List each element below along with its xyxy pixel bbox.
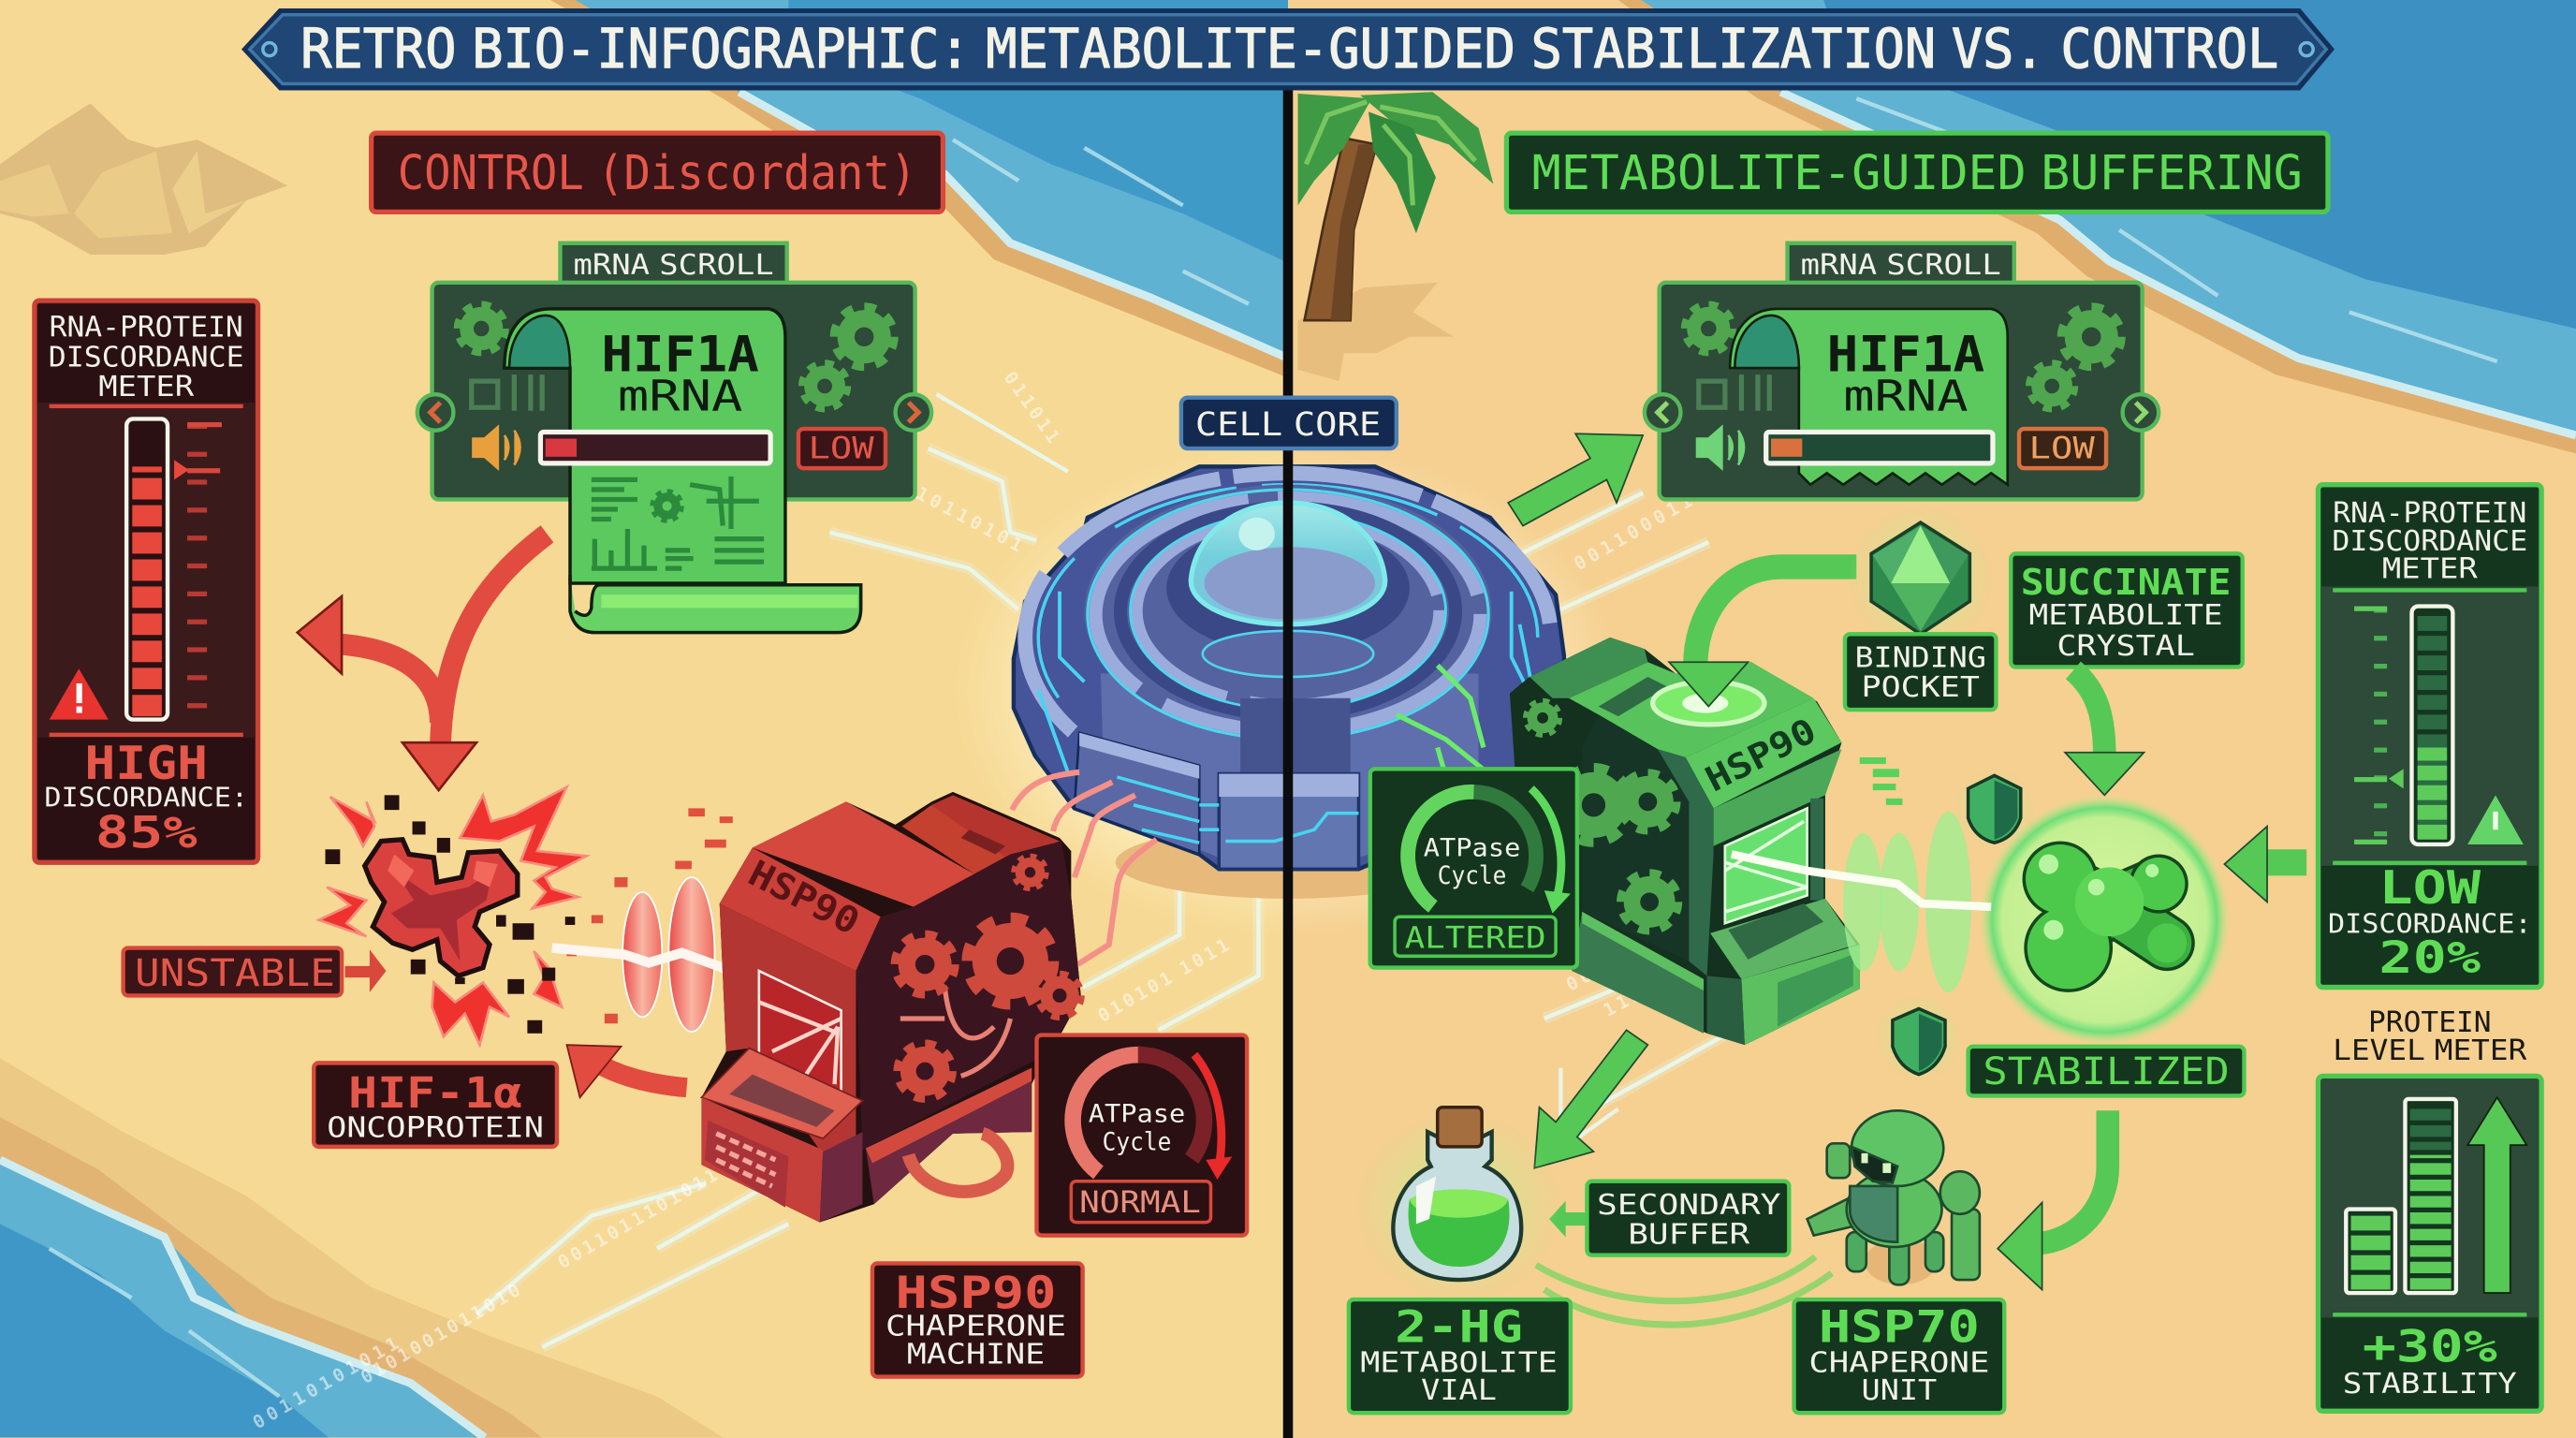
icon: shield upper bbox=[1955, 769, 2034, 847]
label: 2-HG metabolite vial: METABOLITE bbox=[1360, 1346, 1558, 1379]
tall bar bbox=[2405, 1099, 2456, 1293]
label: HIF-1a oncoprotein: ONCOPROTEIN bbox=[327, 1111, 544, 1144]
low tag: LOW bbox=[2029, 433, 2096, 466]
gears bbox=[458, 305, 893, 408]
arrow: core to buffered mRNA bbox=[1508, 433, 1643, 526]
beam: control pulse rings bbox=[552, 877, 736, 1032]
label: succinate metabolite crystal: METABOLITE bbox=[2029, 599, 2223, 632]
progress bar bbox=[1766, 433, 1993, 463]
gears bbox=[1685, 305, 2120, 408]
circuit traces and binary data: 00110101011 bbox=[249, 1332, 402, 1433]
cell core bbox=[951, 444, 1625, 936]
label: binding pocket: POCKET bbox=[1862, 671, 1980, 704]
meter heading: RNA-PROTEIN bbox=[50, 312, 243, 345]
circuit traces and binary data: 0011 1011 01 bbox=[1562, 900, 1718, 995]
meter readout bbox=[2328, 860, 2532, 984]
circuit traces and binary data: 010101 1011 bbox=[1094, 934, 1233, 1027]
scroll tab bbox=[560, 243, 787, 286]
circuit traces and binary data: 0011011101011 bbox=[554, 1165, 722, 1273]
machine: control HSP90 bbox=[701, 792, 1081, 1223]
panel: control ATPase cycle: Cycle bbox=[1103, 1128, 1171, 1156]
panel: control ATPase cycle bbox=[1036, 1028, 1247, 1236]
circuit traces and binary data: 0101001011010 bbox=[357, 1279, 524, 1388]
meter tube bbox=[2354, 607, 2452, 844]
low tag bbox=[2019, 429, 2106, 468]
meter heading: METER bbox=[98, 371, 194, 404]
machine: control HSP90: HSP90 bbox=[741, 853, 866, 944]
icon: warning bbox=[50, 668, 109, 720]
meter heading bbox=[2332, 497, 2527, 586]
arrow: stabilized to HSP70 bbox=[1998, 1110, 2108, 1290]
machine: buffered HSP90: HSP90 bbox=[1699, 711, 1822, 800]
meter readout: 85% bbox=[95, 807, 198, 858]
beam: buffered pulse rings bbox=[1732, 812, 1991, 992]
panel: buffered ATPase cycle: Cycle bbox=[1438, 862, 1506, 890]
central divider bbox=[1283, 91, 1293, 1438]
altered tag: ALTERED bbox=[1405, 922, 1546, 956]
label: 2-HG metabolite vial: 2-HG bbox=[1395, 1302, 1523, 1354]
heading: control: CONTROL (Discordant) bbox=[398, 146, 916, 201]
circuit traces and binary data bbox=[249, 367, 1741, 1433]
arrow: low discordance to protein bbox=[2224, 827, 2306, 902]
arrow: crystal label to stabilized protein bbox=[2065, 670, 2144, 795]
meter readout: 20% bbox=[2378, 932, 2481, 984]
meter heading: METER bbox=[2382, 553, 2478, 586]
icon: HSP70 robot bbox=[1808, 1110, 1980, 1284]
panel: protein level meter bbox=[2318, 1076, 2541, 1411]
meter heading bbox=[49, 312, 244, 404]
meter readout: HIGH bbox=[84, 736, 208, 790]
label: HSP90 chaperone machine bbox=[872, 1263, 1083, 1377]
speaker bbox=[1697, 427, 1744, 468]
core dome bbox=[1191, 503, 1385, 624]
label: stabilized: STABILIZED bbox=[1983, 1049, 2230, 1093]
icon: 2-HG vial bbox=[1357, 1108, 1560, 1303]
label: HIF-1a oncoprotein: HIF-1α bbox=[348, 1068, 522, 1118]
cell core label bbox=[1181, 398, 1397, 448]
label: HSP90 chaperone machine: HSP90 bbox=[896, 1268, 1057, 1319]
label: 2-HG metabolite vial: VIAL bbox=[1421, 1374, 1497, 1407]
scroll tab bbox=[1788, 243, 2014, 286]
machine: buffered HSP90 bbox=[1510, 638, 1902, 1045]
label: HSP90 chaperone machine: MACHINE bbox=[907, 1339, 1045, 1372]
protein level meter heading: PROTEIN bbox=[2368, 1006, 2492, 1039]
sand dunes bbox=[0, 104, 287, 255]
cell core label: CELL CORE bbox=[1195, 405, 1381, 444]
scroll body bbox=[505, 309, 861, 633]
scroll body bbox=[1730, 309, 2008, 485]
callout: secondary buffer: SECONDARY bbox=[1597, 1189, 1781, 1222]
palm tree bbox=[1298, 92, 1493, 320]
title banner: RETRO BIO-INFOGRAPHIC: METABOLITE-GUIDED STABILIZATION VS. CONTROL bbox=[300, 17, 2278, 81]
panel: control mRNA scroll: HIF1A bbox=[601, 327, 759, 384]
panel: control mRNA scroll: mRNA bbox=[618, 372, 742, 421]
core outer wall segments bbox=[1025, 473, 1551, 801]
callout: secondary buffer: BUFFER bbox=[1628, 1218, 1749, 1251]
arrow: control mRNA decay branch bbox=[298, 534, 547, 790]
heading: metabolite-guided buffering bbox=[1506, 133, 2328, 212]
low tag: LOW bbox=[809, 433, 875, 466]
scroll doodles bbox=[592, 477, 764, 568]
meter heading: RNA-PROTEIN bbox=[2333, 497, 2526, 530]
arrow: crystal to HSP90 bbox=[1669, 566, 1856, 707]
heading: metabolite-guided buffering: METABOLITE-GUIDED BUFFERING bbox=[1532, 146, 2303, 201]
icon: stabilized protein sphere bbox=[1980, 795, 2230, 1045]
low tag bbox=[798, 429, 886, 468]
circuit traces and binary data: 1110011 bbox=[1600, 956, 1697, 1021]
ATPase ring bbox=[1382, 766, 1562, 946]
meter heading: DISCORDANCE bbox=[49, 341, 244, 374]
meter readout: STABILITY bbox=[2343, 1368, 2517, 1401]
meter readout: +30% bbox=[2363, 1322, 2497, 1373]
panel: buffered ATPase cycle: ATPase bbox=[1424, 834, 1520, 862]
scroll tab: mRNA SCROLL bbox=[574, 249, 774, 282]
label: succinate metabolite crystal: SUCCINATE bbox=[2021, 562, 2231, 604]
meter readout: DISCORDANCE: bbox=[44, 783, 248, 814]
callout: secondary buffer bbox=[1549, 1181, 1789, 1255]
heading: control bbox=[372, 133, 943, 212]
icon: unstable protein explosion bbox=[318, 787, 733, 1045]
normal tag bbox=[1071, 1181, 1211, 1223]
panel: buffered mRNA scroll: HIF1A bbox=[1827, 327, 1984, 384]
red heat tethers from core bbox=[1012, 772, 1157, 964]
icon: shield lower bbox=[1876, 995, 1962, 1081]
circuit traces and binary data: 011011 bbox=[1000, 367, 1064, 448]
speaker bbox=[473, 427, 520, 468]
label: 2-HG metabolite vial bbox=[1349, 1299, 1571, 1413]
meter readout bbox=[2343, 1322, 2517, 1401]
label: binding pocket: BINDING bbox=[1855, 641, 1986, 674]
arrow: HSP90 to vial bbox=[1534, 1030, 1647, 1168]
panel: control mRNA scroll bbox=[417, 243, 931, 633]
buffer wave lines bbox=[1536, 1256, 1832, 1325]
burst spikes bbox=[318, 787, 587, 1045]
label: HIF-1a oncoprotein bbox=[314, 1063, 557, 1147]
arrow up bbox=[2467, 1097, 2526, 1293]
protein level meter heading bbox=[2333, 1006, 2526, 1067]
panel: control discordance meter bbox=[35, 301, 258, 862]
panel: buffered discordance meter bbox=[2318, 485, 2541, 988]
altered tag bbox=[1395, 917, 1556, 956]
panel: buffered mRNA scroll: mRNA bbox=[1843, 372, 1969, 421]
meter tube bbox=[126, 418, 222, 723]
label: HSP70 chaperone unit: CHAPERONE bbox=[1808, 1346, 1989, 1379]
icon: succinate crystal bbox=[1848, 506, 1993, 651]
normal tag: NORMAL bbox=[1079, 1186, 1201, 1220]
label: HSP70 chaperone unit: HSP70 bbox=[1819, 1302, 1980, 1354]
protein level meter heading: LEVEL METER bbox=[2333, 1034, 2526, 1067]
meter readout: DISCORDANCE: bbox=[2328, 909, 2532, 940]
icon: warning bbox=[2467, 795, 2524, 844]
label: succinate metabolite crystal bbox=[2011, 553, 2243, 667]
circuit traces and binary data: 0110110101 bbox=[886, 468, 1026, 556]
label: unstable: UNSTABLE bbox=[135, 951, 335, 995]
label: HSP70 chaperone unit bbox=[1794, 1299, 2004, 1413]
label: HSP90 chaperone machine: CHAPERONE bbox=[886, 1311, 1066, 1343]
progress bar bbox=[540, 433, 770, 463]
ATPase ring bbox=[1046, 1028, 1231, 1212]
core labyrinth rings bbox=[1088, 490, 1488, 740]
meter readout bbox=[44, 736, 248, 858]
circuit traces and binary data: 0011000110 bbox=[1571, 482, 1709, 575]
short bar bbox=[2346, 1210, 2395, 1293]
label: binding pocket bbox=[1845, 634, 1996, 710]
panel: control ATPase cycle: ATPase bbox=[1089, 1101, 1185, 1129]
meter readout: LOW bbox=[2378, 860, 2481, 915]
arrow: HSP90 to HIF-1a bbox=[567, 1045, 687, 1097]
protein blob bbox=[2023, 841, 2188, 992]
palm tree shadow bbox=[1298, 283, 1454, 381]
scroll tab: mRNA SCROLL bbox=[1801, 249, 2001, 282]
label: unstable bbox=[124, 948, 386, 995]
panel: buffered mRNA scroll bbox=[1645, 243, 2159, 499]
green sparks into core bbox=[1397, 666, 1486, 805]
meter heading: DISCORDANCE bbox=[2332, 525, 2527, 558]
panel: buffered ATPase cycle bbox=[1370, 766, 1577, 968]
label: HSP70 chaperone unit: UNIT bbox=[1862, 1374, 1937, 1407]
label: succinate metabolite crystal: CRYSTAL bbox=[2056, 630, 2195, 663]
